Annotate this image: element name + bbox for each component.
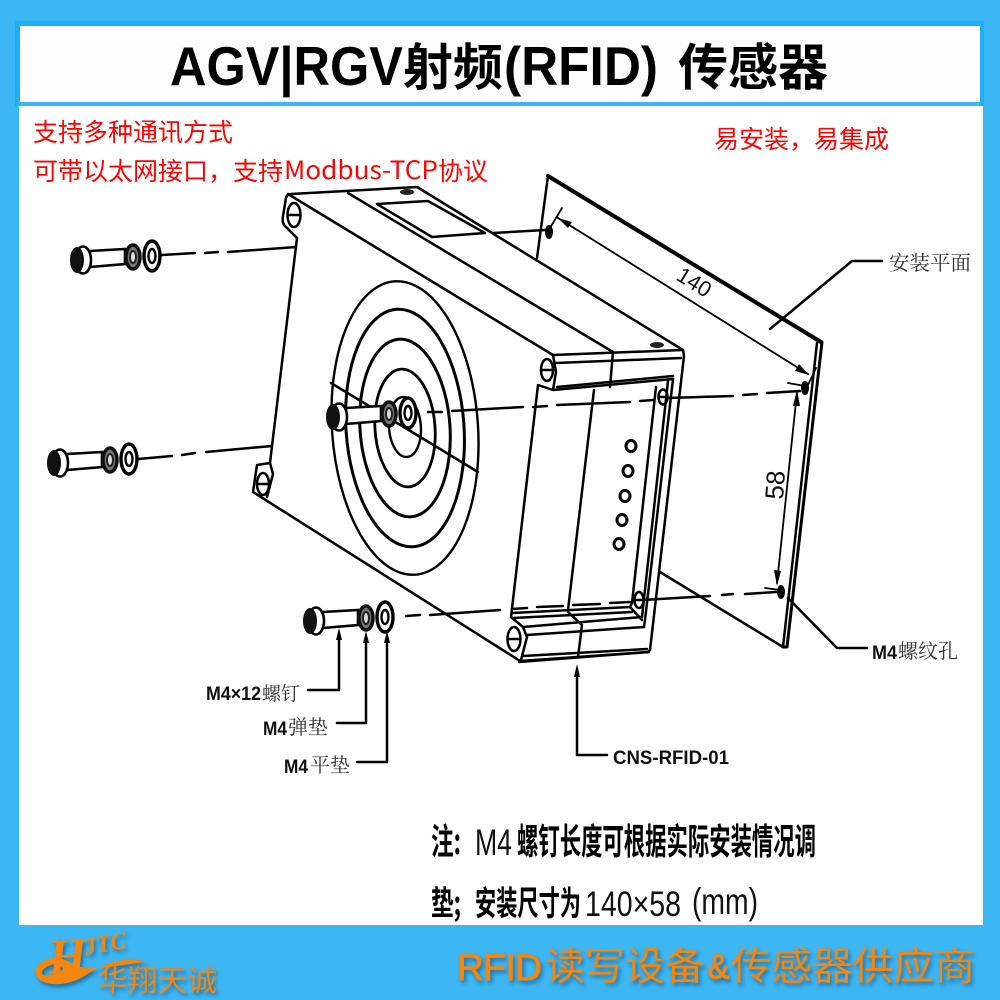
screw set bottom left	[47, 444, 137, 476]
callout: M4 spring washer	[263, 631, 369, 740]
callout: mounting plane	[770, 246, 971, 329]
installation note: 注:	[431, 814, 461, 865]
logo: H	[46, 927, 91, 985]
title: (RFID)	[504, 35, 658, 97]
callout: M4 threaded hole: 螺纹孔	[898, 635, 958, 664]
callout: M4 spring washer: 弹垫	[288, 711, 328, 740]
mounting plate	[537, 176, 822, 647]
supplier slogan: &	[707, 946, 730, 987]
installation note: 安装尺寸为	[475, 878, 581, 926]
supplier slogan: 传感器供应商	[731, 936, 975, 992]
title: AGV|RGV	[170, 35, 403, 98]
installation note: (mm)	[692, 880, 758, 922]
dimension 58: 58	[759, 469, 791, 500]
callout: mounting plane: 安装平面	[889, 246, 971, 276]
LED indicators	[614, 440, 636, 550]
screw set bottom	[303, 602, 393, 634]
callout: model number: CNS-RFID-01	[613, 748, 729, 769]
title: 传感器	[678, 28, 828, 100]
title	[20, 26, 980, 102]
callout: M4x12 screw: M4×12	[206, 684, 261, 705]
installation note: 140×58	[585, 885, 681, 924]
dimension 58	[759, 390, 800, 590]
dimension 140: 140	[672, 262, 716, 302]
logo: 华翔天诚	[98, 958, 217, 1000]
front opening frame	[511, 350, 683, 617]
installation note: 垫;	[431, 878, 461, 926]
callout: M4 flat washer: 平垫	[310, 749, 350, 778]
callout: M4x12 screw: 螺钉	[262, 679, 300, 706]
antenna rings	[322, 276, 488, 580]
feature text: communication: Modbus-TCP	[284, 151, 438, 187]
feature text: communication	[33, 113, 488, 188]
header frame	[15, 21, 984, 106]
supplier slogan: RFID	[457, 947, 542, 988]
callout: M4x12 screw	[206, 628, 342, 706]
supplier slogan	[457, 936, 975, 992]
feature text: communication: 协议	[438, 152, 488, 188]
callout: M4 threaded hole: M4	[872, 643, 897, 664]
feature text: easy install: 易安装，易集成	[714, 120, 889, 156]
title: 射频	[403, 28, 503, 100]
logo: JTC	[82, 928, 129, 961]
feature text: communication: 可带以太网接口，支持	[33, 152, 283, 188]
callout: M4 spring washer: M4	[263, 719, 287, 740]
callout: M4 threaded hole	[788, 598, 958, 664]
installation note: M4	[475, 821, 512, 864]
callout: model number	[574, 664, 729, 769]
screw set centre	[326, 398, 416, 430]
main white panel	[19, 106, 983, 925]
installation note	[431, 814, 816, 926]
screw set top	[70, 241, 160, 274]
feature text: communication: 支持多种通讯方式	[33, 113, 233, 149]
supplier slogan: 读写设备	[545, 936, 705, 992]
dimension 140	[550, 208, 816, 387]
installation note: 螺钉长度可根据实际安装情况调	[517, 814, 816, 865]
callout: M4 flat washer	[284, 631, 390, 778]
logo	[36, 927, 217, 1000]
callout: M4 flat washer: M4	[284, 757, 308, 778]
fastener axis lines	[138, 230, 800, 616]
sensor housing	[252, 187, 684, 662]
lower frame	[511, 603, 649, 662]
